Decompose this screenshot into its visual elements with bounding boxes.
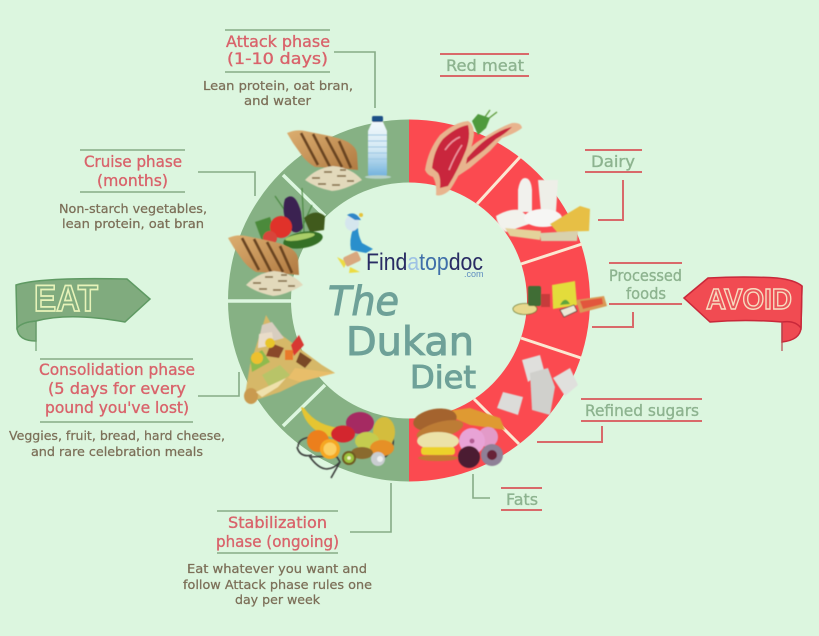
- label: Attack phase: [203, 30, 353, 108]
- label: Cruise phase: (months): [97, 171, 168, 190]
- label: Stabilization phase: Stabilization: [228, 513, 327, 532]
- label: Fats: [501, 488, 542, 510]
- label: Stabilization phase: phase (ongoing): [216, 532, 339, 551]
- label: Consolidation phase: and rare celebration meals: [31, 444, 203, 459]
- label: Consolidation phase: Consolidation phase: [39, 360, 195, 379]
- label: Fats: Fats: [506, 490, 538, 509]
- banner: AVOID: [684, 277, 802, 351]
- label: Red meat: Red meat: [446, 56, 524, 75]
- label: Processed foods: [609, 263, 682, 304]
- label: Consolidation phase: Veggies, fruit, bread, hard cheese,: [9, 428, 225, 443]
- title: The Dukan Diet: Dukan: [346, 320, 474, 365]
- connector: Attack phase: [334, 52, 375, 108]
- icon: red meat: [425, 110, 522, 195]
- diet ring: [228, 120, 590, 482]
- connector: Processed foods: [592, 312, 633, 327]
- title: The Dukan Diet: The: [328, 279, 399, 325]
- logo: Findatopdoc: [337, 213, 484, 279]
- title: The Dukan Diet: Diet: [410, 360, 476, 396]
- connector: Refined sugars: [537, 426, 602, 442]
- icon: fried foods and donuts: [411, 405, 505, 468]
- connector: Dairy: [598, 180, 623, 220]
- label: Attack phase: Lean protein, oat bran,: [203, 78, 353, 93]
- label: Processed foods: foods: [626, 284, 666, 303]
- icon: sugar cubes: [497, 355, 578, 415]
- label: Stabilization phase: day per week: [235, 592, 321, 607]
- connector: Cruise phase: [198, 172, 255, 196]
- label: Cruise phase: [59, 150, 207, 231]
- icon: mascot: [337, 213, 373, 273]
- icon: processed foods: [513, 281, 607, 317]
- label: Attack phase: (1-10 days): [227, 49, 328, 68]
- icon: fruit and stethoscope: [297, 407, 395, 478]
- label: Dairy: [585, 150, 642, 172]
- ring: eat half: [228, 120, 409, 482]
- banner: EAT: [16, 278, 150, 351]
- label: Stabilization phase: Eat whatever you want and: [187, 561, 367, 576]
- label: Attack phase: and water: [244, 93, 312, 108]
- title: The Dukan Diet: [328, 279, 476, 396]
- icon: grilled chicken and oat bran (cruise): [228, 235, 303, 296]
- icon: vegetables: [255, 188, 325, 251]
- connector: Stabilization phase: [350, 483, 391, 532]
- label: Refined sugars: Refined sugars: [585, 401, 699, 420]
- label: Consolidation phase: [9, 359, 225, 459]
- label: Consolidation phase: pound you've lost): [45, 398, 189, 417]
- banner: AVOID: AVOID: [706, 284, 792, 316]
- label: Cruise phase: Non-starch vegetables,: [59, 201, 207, 216]
- icon: water bottle: [365, 116, 391, 179]
- logo .com: .com: [464, 269, 484, 279]
- label: Cruise phase: Cruise phase: [84, 152, 182, 171]
- connector: Fats: [473, 474, 490, 498]
- icon: dairy products: [496, 178, 590, 241]
- label: Cruise phase: lean protein, oat bran: [62, 216, 204, 231]
- label: Stabilization phase: follow Attack phase rules one: [183, 577, 372, 592]
- connector: Consolidation phase: [198, 372, 239, 396]
- label: Consolidation phase: (5 days for every: [48, 379, 186, 398]
- logo wordmark: Findatopdoc: [366, 249, 483, 276]
- label: Attack phase: Attack phase: [226, 32, 330, 51]
- label: Processed foods: Processed: [609, 266, 682, 285]
- banner: EAT: EAT: [34, 278, 98, 319]
- label: Dairy: Dairy: [591, 152, 635, 171]
- label: Stabilization phase: [183, 511, 372, 607]
- icon: food pyramid: [244, 315, 335, 404]
- icon: grilled chicken and oat bran (attack): [287, 130, 362, 191]
- ring: avoid half: [409, 120, 590, 482]
